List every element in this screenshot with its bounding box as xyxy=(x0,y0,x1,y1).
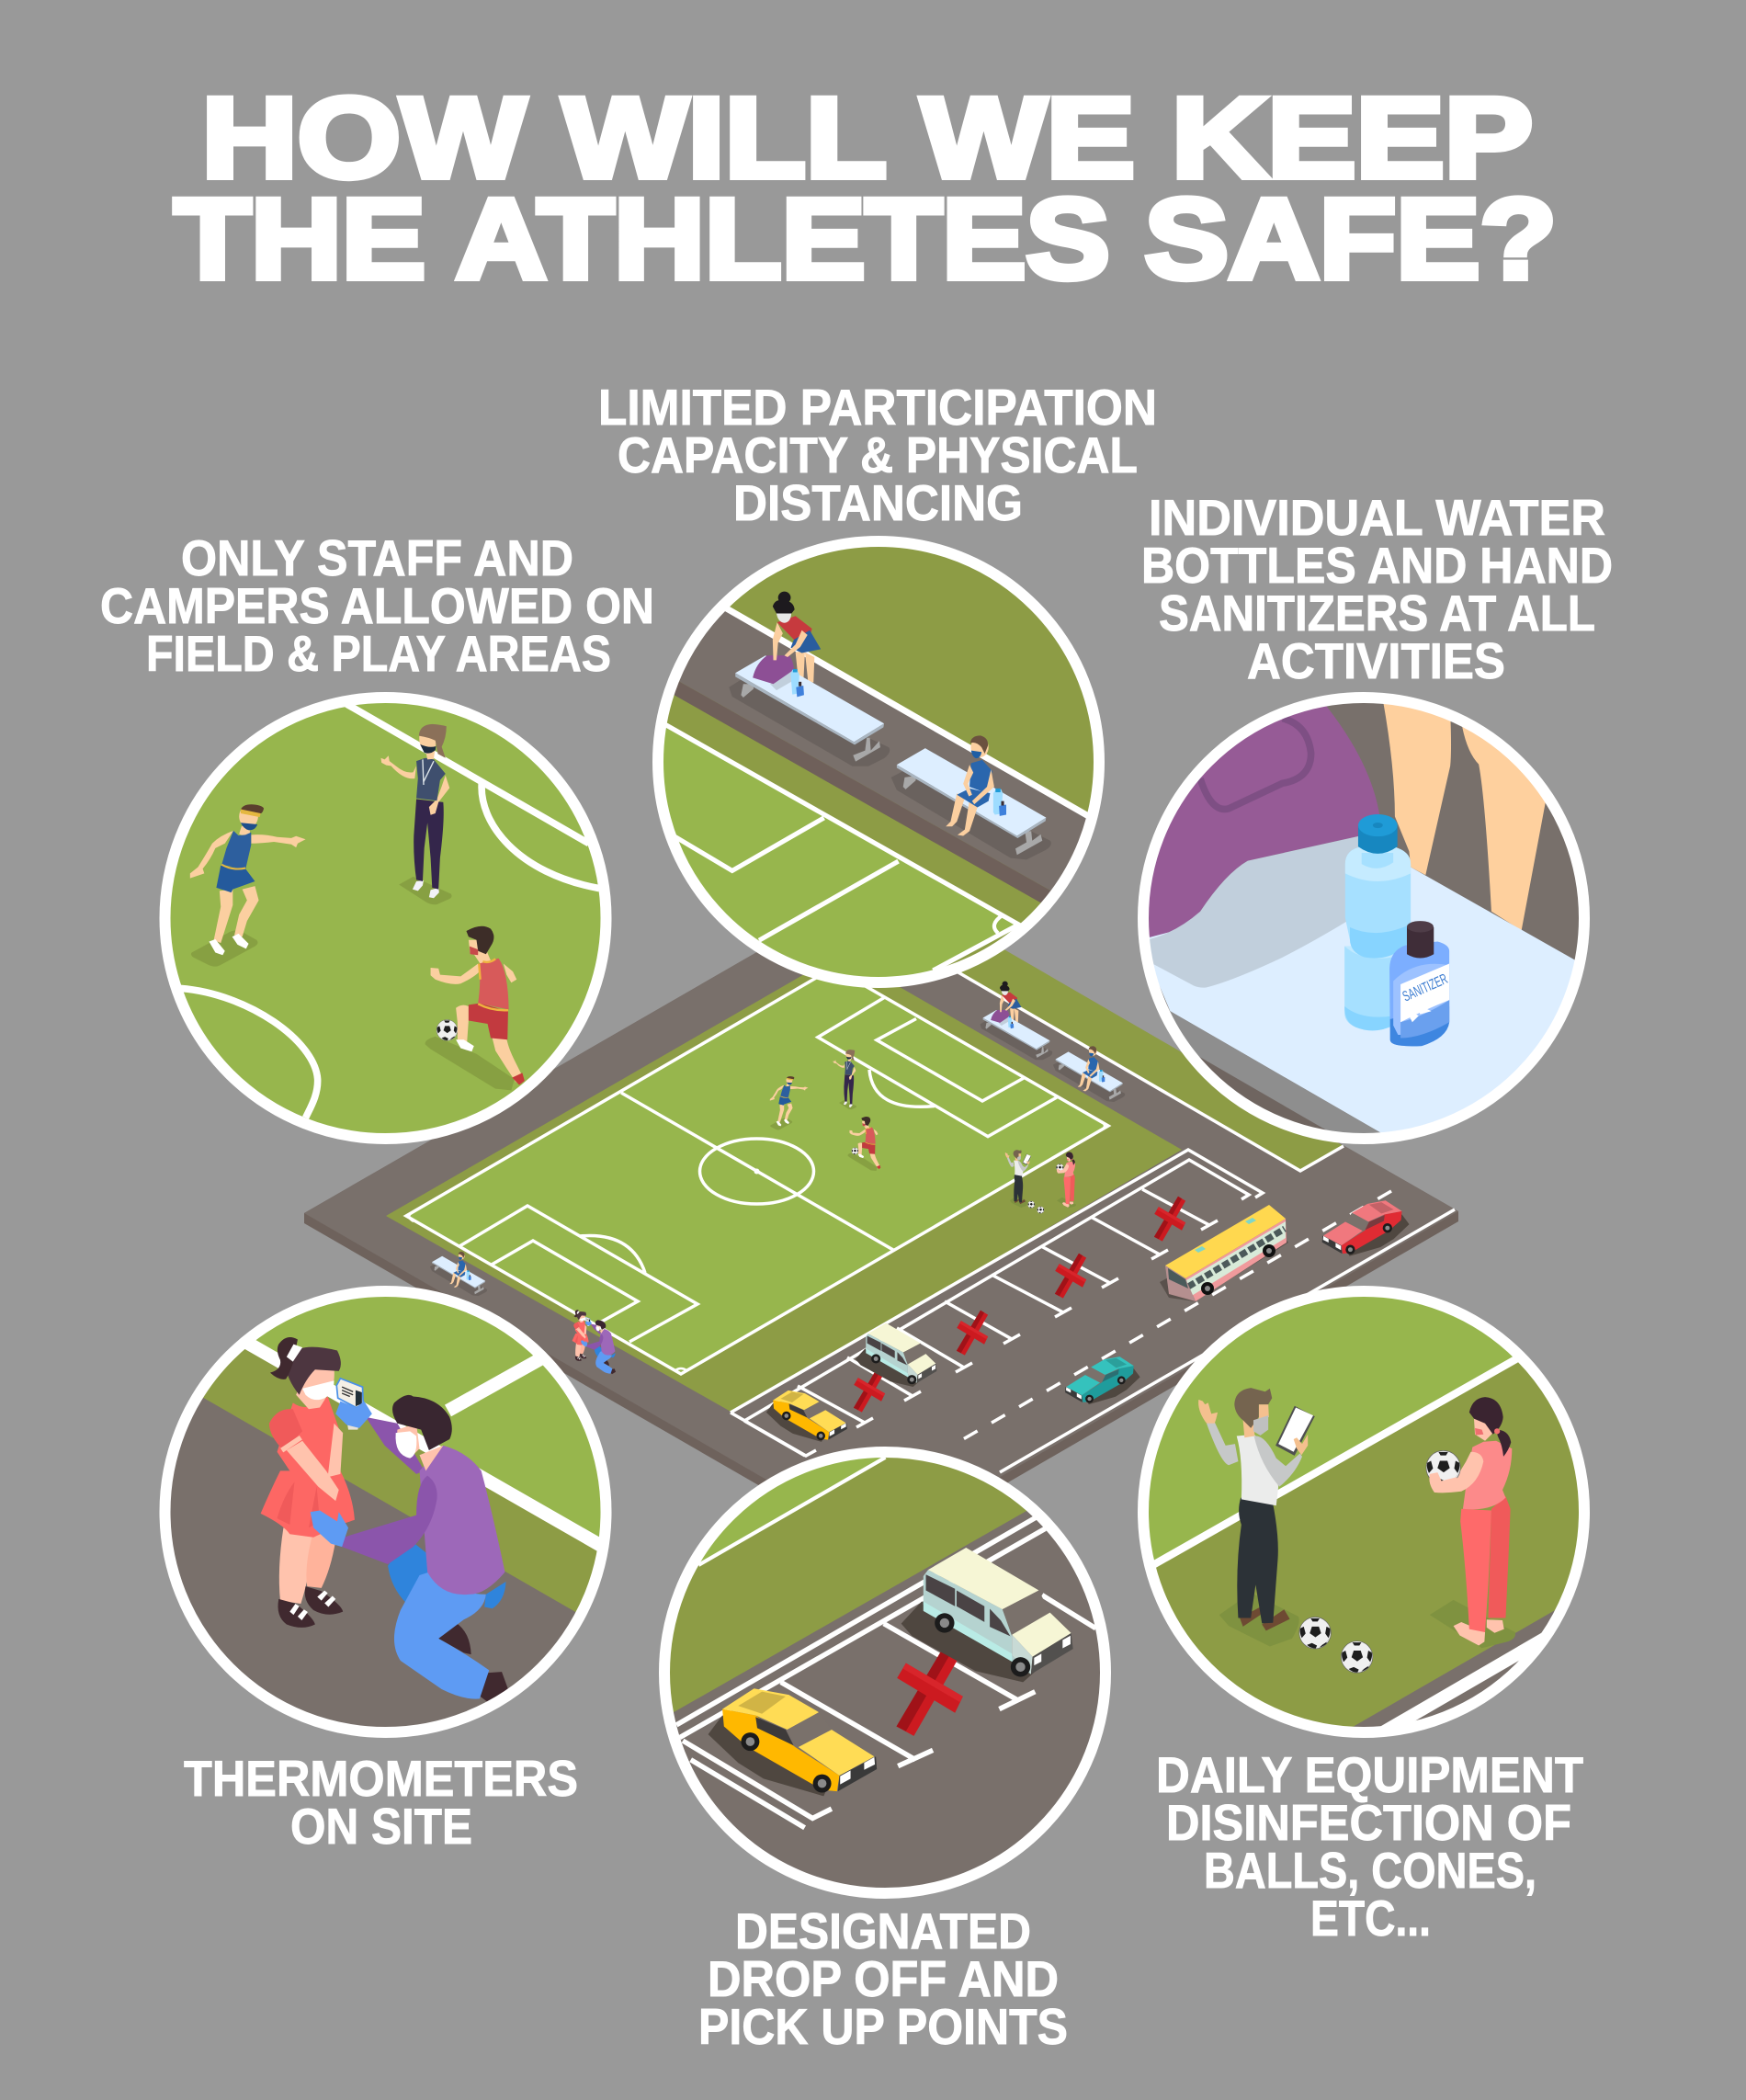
title: HOW WILL WE KEEP xyxy=(202,75,1533,202)
adult raised arm xyxy=(366,1417,425,1474)
pitch corner grass xyxy=(643,1434,928,1596)
small red x markers xyxy=(854,1197,1185,1413)
sanitizer bottle: SANITIZER xyxy=(1400,971,1450,1005)
bench side xyxy=(1170,1011,1380,1133)
label: limited participation: DISTANCING xyxy=(733,474,1023,531)
legs xyxy=(1382,697,1545,930)
label: water bottles and sanitizers: ACTIVITIES xyxy=(1247,632,1505,689)
label: daily equipment: DAILY EQUIPMENT xyxy=(1156,1746,1583,1803)
label: daily equipment: ETC... xyxy=(1310,1890,1431,1947)
panel: water bottle and sanitizer circle xyxy=(1138,692,1590,1144)
player in red with ball xyxy=(425,926,525,1090)
yellow car xyxy=(709,1688,877,1796)
girl and adult with thermometer xyxy=(261,1337,508,1702)
parking lines xyxy=(676,1517,1095,1828)
circle ring xyxy=(165,1291,607,1732)
small thermometer figures xyxy=(573,1310,616,1374)
panel: staff and campers circle xyxy=(160,692,612,1144)
panel: equipment disinfection circle xyxy=(1121,1268,1617,1765)
sanitizer bottle xyxy=(1389,921,1450,1046)
brown edge xyxy=(1352,1608,1617,1765)
parking asphalt xyxy=(643,1497,1139,1930)
circle ring xyxy=(664,1452,1105,1893)
adult back leg shadow tones xyxy=(388,1538,506,1608)
small red car xyxy=(1322,1200,1410,1256)
water bottle xyxy=(1344,814,1411,1030)
label: water bottles and sanitizers: BOTTLES AND HAND xyxy=(1141,537,1613,594)
girl xyxy=(279,1527,313,1604)
adult upper glove xyxy=(335,1402,372,1428)
bench and girl with bag xyxy=(729,592,890,766)
olive ground xyxy=(643,1434,1139,1930)
walkway edge xyxy=(672,679,1052,904)
wide white lines xyxy=(247,1343,603,1547)
brown ground xyxy=(1160,703,1579,1132)
label: thermometers: ON SITE xyxy=(290,1798,472,1855)
adult lower glove xyxy=(311,1510,348,1547)
ground slab xyxy=(304,880,1458,1556)
small staff and equipment xyxy=(1005,1150,1076,1213)
brown walkway xyxy=(679,611,1086,891)
ground under bench xyxy=(1199,1057,1326,1130)
bus xyxy=(1160,1205,1288,1301)
adult sleeve xyxy=(342,1476,437,1564)
field grass xyxy=(663,728,1014,977)
man with tablet xyxy=(1198,1388,1315,1647)
circle ring xyxy=(658,541,1099,982)
label: limited participation: CAPACITY & PHYSICAL xyxy=(618,426,1138,483)
label: drop off and pick up: PICK UP POINTS xyxy=(698,1998,1068,2055)
grass xyxy=(255,1297,601,1537)
circle ring xyxy=(165,698,607,1139)
olive strip upper right xyxy=(882,901,1344,1171)
pitch line xyxy=(698,1458,885,1565)
adult boots xyxy=(438,1623,508,1702)
white edge band xyxy=(1379,1630,1545,1727)
circle ring xyxy=(1143,1291,1584,1732)
label: water bottles and sanitizers: INDIVIDUAL WATER xyxy=(1149,489,1605,546)
coach with whistle xyxy=(380,724,452,904)
olive ground xyxy=(1140,1351,1617,1765)
label: daily equipment: BALLS, CONES, xyxy=(1204,1842,1536,1899)
bench top xyxy=(1140,868,1583,1146)
label: daily equipment xyxy=(1156,1746,1583,1947)
parking lot markings xyxy=(731,1150,1263,1456)
olive surround xyxy=(386,953,1182,1413)
small bench lower left xyxy=(430,1252,487,1296)
label: limited participation: LIMITED PARTICIPATION xyxy=(598,379,1157,436)
red x marker xyxy=(897,1641,963,1736)
small players on pitch xyxy=(770,1050,880,1171)
panel: benches circle xyxy=(652,536,1105,988)
road boundary lines xyxy=(928,955,1455,1472)
olive ground xyxy=(666,547,1094,967)
bench and seated athlete xyxy=(891,735,1051,859)
white boundary line xyxy=(1152,1357,1518,1565)
label: only staff and campers: FIELD & PLAY AREAS xyxy=(146,625,611,682)
central isometric sports field scene xyxy=(304,880,1458,1556)
adult body xyxy=(420,1446,505,1595)
panel: drop off parking circle xyxy=(643,1434,1139,1930)
purple bag xyxy=(1149,706,1379,937)
thermometer xyxy=(336,1379,363,1408)
field lines xyxy=(647,714,1018,971)
title xyxy=(175,75,1557,303)
label: water bottles and sanitizers: SANITIZERS AT ALL xyxy=(1159,585,1595,641)
small yellow car xyxy=(766,1391,847,1442)
soccer pitch xyxy=(406,968,1108,1374)
small van xyxy=(856,1323,936,1387)
label: only staff and campers: CAMPERS ALLOWED ON xyxy=(100,577,654,634)
title: THE ATHLETES SAFE? xyxy=(175,176,1557,303)
bag handle xyxy=(1200,719,1311,809)
label: only staff and campers xyxy=(100,529,654,682)
label: water bottles and sanitizers xyxy=(1141,489,1613,689)
grass xyxy=(171,703,601,1133)
label: drop off and pick up xyxy=(698,1902,1068,2055)
small teal car xyxy=(1065,1356,1140,1404)
panel: thermometer circle xyxy=(160,1286,612,1738)
label: thermometers xyxy=(184,1750,578,1855)
small benches upper right xyxy=(980,982,1125,1102)
label: only staff and campers: ONLY STAFF AND xyxy=(181,529,573,586)
label: drop off and pick up: DESIGNATED xyxy=(735,1902,1031,1959)
label: daily equipment: DISINFECTION OF xyxy=(1166,1794,1571,1851)
olive strip xyxy=(198,1345,607,1617)
adult trousers xyxy=(394,1572,489,1699)
label: thermometers: THERMOMETERS xyxy=(184,1750,578,1807)
player in blue xyxy=(190,804,306,967)
corner arc xyxy=(994,915,1003,933)
woman holding ball xyxy=(1426,1397,1515,1648)
label: limited participation xyxy=(598,379,1157,531)
pitch lines xyxy=(180,704,599,1118)
grass xyxy=(1121,1268,1617,1765)
label: drop off and pick up: DROP OFF AND xyxy=(708,1950,1059,2007)
brown walkway xyxy=(171,1397,575,1727)
soccer balls on ground xyxy=(1299,1618,1373,1673)
white van xyxy=(901,1548,1073,1682)
road centre dashes xyxy=(952,1191,1391,1446)
white boundary line xyxy=(726,608,1090,817)
bag shadow on bench xyxy=(1147,835,1362,988)
circle ring xyxy=(1143,698,1584,1139)
adult head xyxy=(420,1446,443,1470)
